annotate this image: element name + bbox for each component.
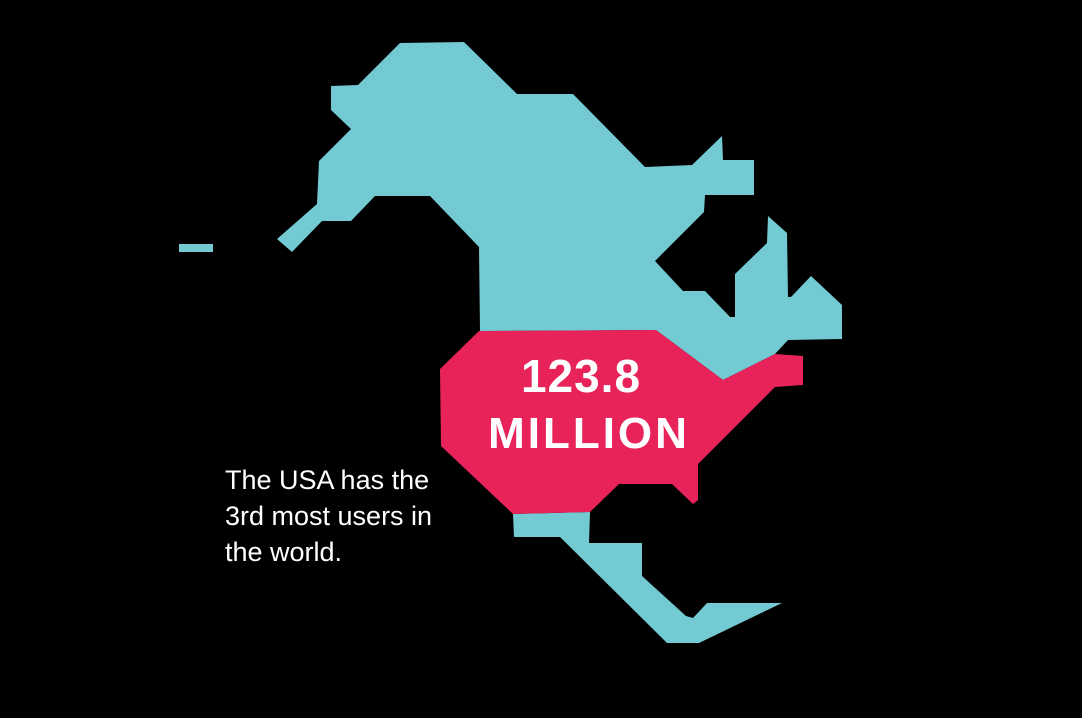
text block: caption: the world. (225, 537, 342, 567)
region: Mexico and Central America (513, 512, 782, 643)
text block: caption: The USA has the (225, 465, 429, 495)
stat: 123.8 million (488, 350, 690, 458)
stat: 123.8 million: 123.8 (521, 350, 641, 402)
region: Alaska island bar (179, 244, 213, 252)
text block: caption (225, 465, 432, 567)
text block: caption: 3rd most users in (225, 501, 432, 531)
region: Canada and Alaska (277, 42, 842, 380)
stat: 123.8 million: MILLION (488, 409, 690, 458)
region: USA highlighted (440, 330, 803, 514)
